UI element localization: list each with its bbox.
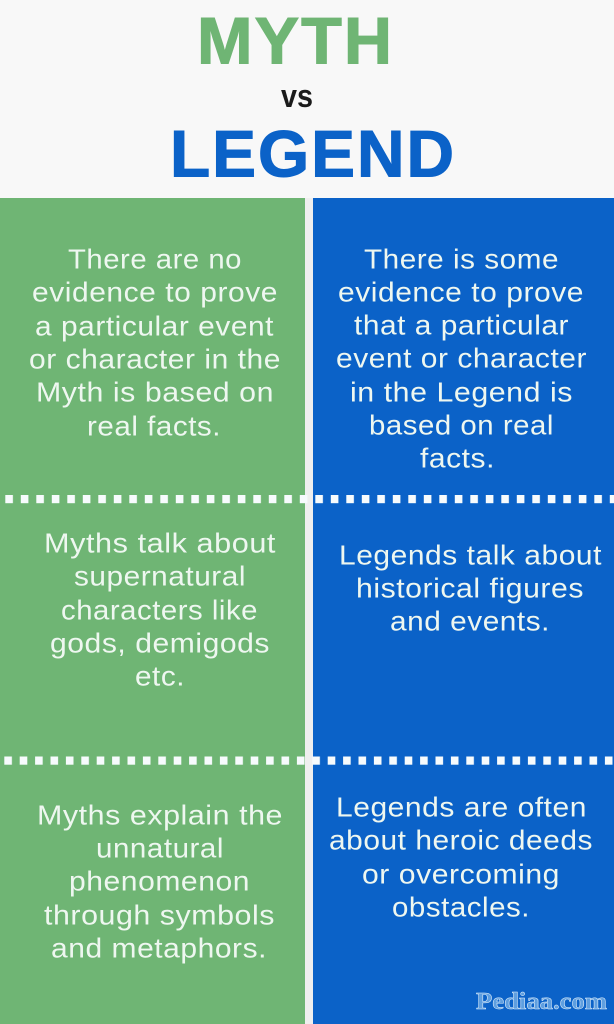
- text: legend evidence: that a particular: [354, 310, 569, 341]
- text: myth evidence: a particular event: [35, 311, 274, 342]
- text: legend deeds: about heroic deeds: [329, 825, 593, 856]
- text: myth evidence: [29, 244, 281, 442]
- text: legend subjects: and events.: [390, 606, 550, 637]
- divider: dotted row 1: [0, 495, 614, 504]
- text: legend evidence: event or character: [336, 343, 587, 374]
- logo: Pediaa.com: Pediaa.com: [476, 989, 607, 1015]
- text: myth explanation: unnatural: [96, 833, 224, 864]
- text: legend subjects: Legends talk about: [339, 540, 602, 571]
- text: legend evidence: facts.: [420, 443, 495, 474]
- text: legend evidence: based on real: [369, 410, 554, 441]
- text: legend subjects: [339, 540, 602, 637]
- text: myth evidence: or character in the: [29, 344, 281, 375]
- text: myth evidence: evidence to prove: [32, 277, 278, 308]
- text: legend evidence: [336, 244, 587, 474]
- text: myth explanation: and metaphors.: [51, 933, 267, 964]
- vs label: vs: [281, 78, 313, 114]
- text: myth subjects: Myths talk about: [44, 528, 276, 559]
- text: myth evidence: real facts.: [87, 411, 221, 442]
- text: legend deeds: Legends are often: [336, 792, 587, 823]
- text: myth subjects: supernatural: [74, 561, 246, 592]
- title: Myth: MYTH: [197, 4, 394, 78]
- text: myth explanation: Myths explain the: [37, 800, 283, 831]
- text: legend subjects: historical figures: [356, 573, 584, 604]
- text: myth subjects: gods, demigods: [50, 628, 270, 659]
- panel: legend column: [313, 198, 614, 1024]
- text: legend deeds: or overcoming: [362, 859, 560, 890]
- text: myth explanation: [37, 800, 283, 964]
- panel: myth column: [0, 198, 305, 1024]
- text: legend evidence: in the Legend is: [350, 377, 573, 408]
- text: myth evidence: There are no: [68, 244, 242, 275]
- text: myth explanation: through symbols: [44, 900, 275, 931]
- text: legend evidence: evidence to prove: [338, 277, 584, 308]
- title: Legend: LEGEND: [170, 116, 456, 190]
- text: legend evidence: There is some: [364, 244, 559, 275]
- text: legend deeds: [329, 792, 593, 923]
- divider: dotted row 2: [0, 756, 614, 766]
- text: myth subjects: characters like: [61, 595, 258, 626]
- text: myth evidence: Myth is based on: [36, 377, 274, 408]
- text: myth subjects: etc.: [135, 661, 185, 692]
- text: myth explanation: phenomenon: [69, 866, 250, 897]
- text: myth subjects: [44, 528, 276, 692]
- text: legend deeds: obstacles.: [392, 892, 530, 923]
